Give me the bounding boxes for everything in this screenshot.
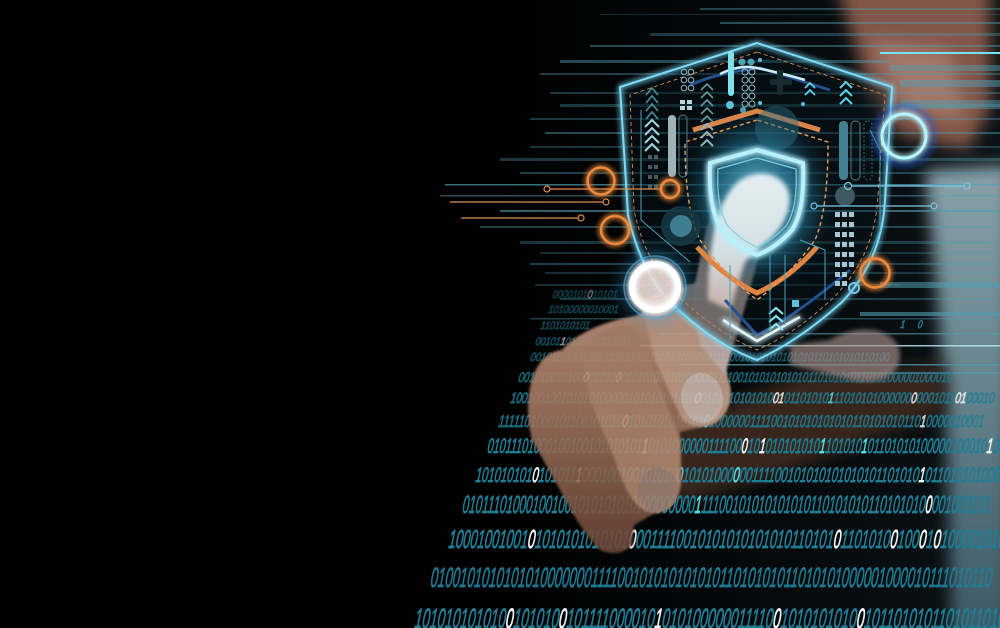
top lens circle	[755, 106, 799, 150]
vertical bars	[668, 51, 848, 180]
row: 100100100101010100000101010101010001010101010100101101010111010101000000000010110100010	[510, 389, 996, 407]
dashed mid shield	[685, 120, 828, 300]
outer dashed line	[630, 52, 885, 350]
bottom white chevron	[723, 317, 800, 341]
outer outline	[620, 43, 892, 360]
hand base	[528, 285, 730, 553]
forearm shadow	[640, 365, 945, 505]
dot matrix right	[835, 212, 854, 286]
pointing finger	[692, 195, 760, 375]
digits right: 1 0	[899, 319, 924, 331]
blue connector lines	[811, 182, 970, 293]
hand	[528, 195, 900, 553]
circle columns	[681, 69, 755, 107]
top white arc	[720, 67, 805, 80]
orange rings	[588, 168, 890, 288]
row: 10101010101010111000100100101010010101000000111100101010101010101101010101101010100010	[474, 463, 1000, 487]
row: 10100000010001	[547, 304, 620, 316]
concentric dial	[661, 206, 701, 246]
thumbnail	[678, 370, 726, 426]
fingertip	[708, 174, 790, 310]
blue diagonals	[690, 68, 850, 335]
square node	[792, 300, 799, 307]
row: 0000101010101	[551, 289, 619, 301]
blue ring	[875, 107, 933, 165]
orange band	[693, 111, 820, 130]
middle finger	[582, 326, 680, 513]
shield	[620, 43, 892, 360]
dark cross emblem	[770, 70, 792, 95]
shield fill	[620, 43, 892, 360]
row: 1101010101	[539, 320, 591, 332]
top nodes	[726, 58, 805, 113]
small shield	[710, 150, 803, 255]
row: 010111010001001001010101011010100000011110001010101010101101010101101010100000100010100	[486, 434, 1000, 458]
row: 1111101000101100101010010101010101010100000011110010101010101011010101011010000010001	[497, 413, 985, 432]
dot matrix left	[648, 100, 692, 189]
row: 001010010100001010001010101010100000111100101010101010110101010110101000001000010	[517, 369, 954, 385]
central glow	[677, 105, 837, 295]
finger nail	[638, 468, 678, 512]
row: 010010101010101000000011110010101010101011010101011010101000001000010111010110	[429, 561, 994, 593]
blurred person in background	[835, 0, 1000, 628]
row: 0010110101001010101	[534, 336, 632, 348]
row: 0101110100010010010101010101000000001111001010101010101101010101101010100001000101	[461, 491, 992, 519]
row: 1000100100101010101010101000111100101010101010101101010110101001000101000010101	[447, 525, 1000, 554]
speed lines	[440, 8, 1000, 374]
thumb section	[640, 280, 730, 426]
background finger	[790, 330, 900, 381]
touch ring	[619, 251, 691, 323]
row: 0010110100100101010000110101010101011110010101010101010110101010110100	[529, 351, 891, 364]
line end nodes	[544, 186, 550, 192]
right grey dot	[835, 186, 855, 206]
chevron stacks	[645, 82, 852, 330]
orange connector lines	[450, 186, 662, 221]
binary rows	[413, 289, 1000, 628]
circuit traces	[641, 110, 880, 340]
